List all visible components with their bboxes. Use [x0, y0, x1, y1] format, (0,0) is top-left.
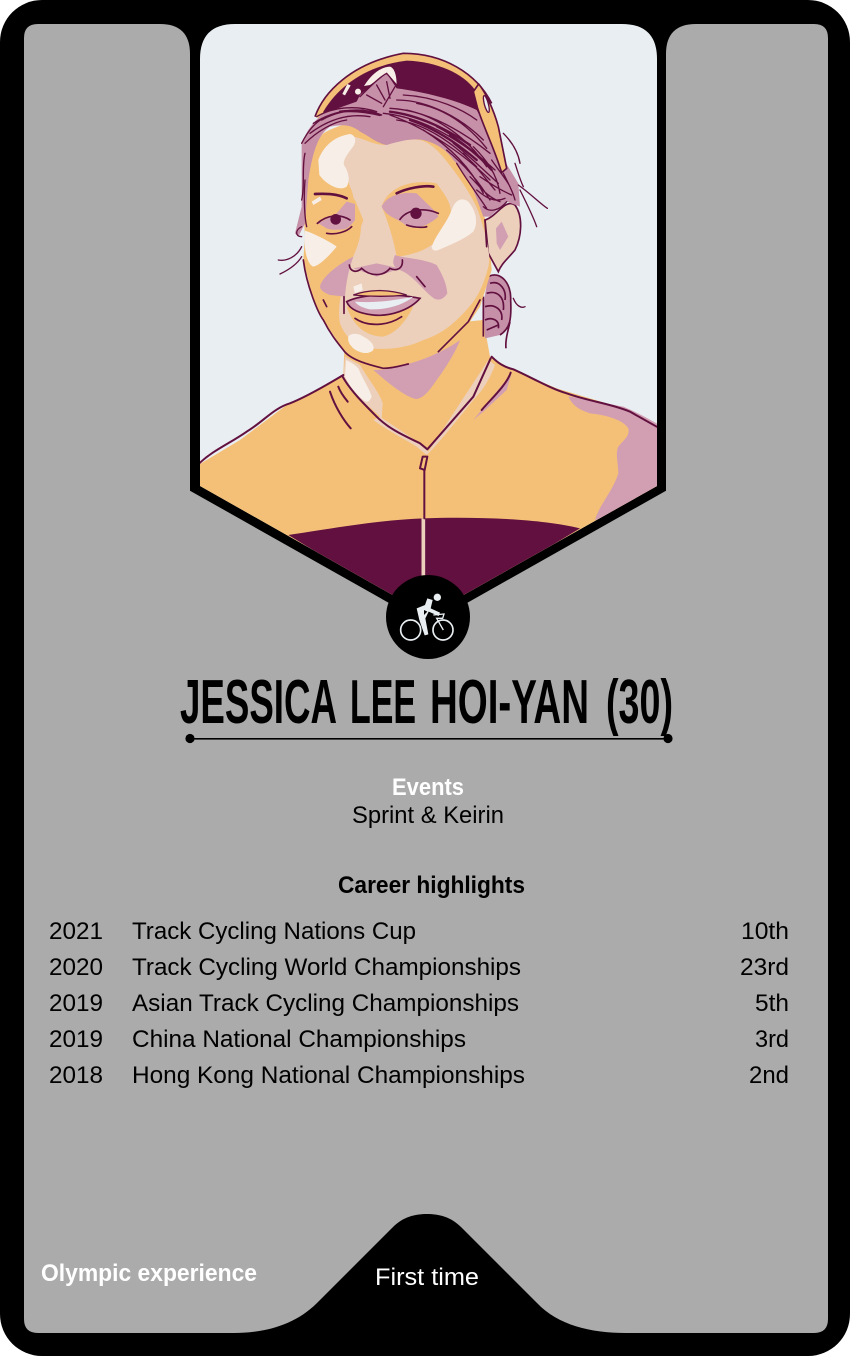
career highlights table: 2020: [49, 954, 103, 981]
hair: [295, 73, 520, 237]
career highlights table: 2nd: [749, 1062, 789, 1089]
career highlights table: 5th: [755, 990, 789, 1017]
facial features: [303, 186, 487, 368]
highlights: [318, 134, 355, 188]
hair strands and flyaways: [278, 73, 547, 307]
athlete name: (30): [606, 668, 673, 737]
icon badge: cyclist: [386, 575, 470, 659]
skin tones: [339, 137, 489, 349]
career highlights table: 3rd: [755, 1026, 789, 1053]
career highlights table: China National Championships: [132, 1026, 466, 1053]
cheek shadows: [393, 255, 447, 300]
career highlights table: [49, 918, 789, 1089]
bun: [483, 275, 511, 348]
athlete name: JESSICA: [180, 668, 337, 737]
athlete name: HOI-YAN: [430, 668, 589, 737]
career highlights table: 2019: [49, 990, 103, 1017]
ear: [485, 204, 521, 272]
jersey and neck: [200, 320, 657, 595]
career highlights table: Hong Kong National Championships: [132, 1062, 525, 1089]
portrait illustration: [200, 24, 657, 595]
career highlights heading: Career highlights: [338, 872, 525, 899]
olympic experience value: First time: [375, 1264, 479, 1291]
career highlights table: 10th: [741, 918, 789, 945]
career highlights table: Asian Track Cycling Championships: [132, 990, 519, 1017]
career highlights table: 23rd: [740, 954, 789, 981]
career highlights table: 2021: [49, 918, 103, 945]
face: [303, 120, 492, 368]
visor arm: [473, 84, 507, 173]
name underline: [185, 734, 673, 743]
career highlights table: Track Cycling Nations Cup: [132, 918, 416, 945]
events heading: Events: [392, 774, 464, 801]
sunglasses and visor: [315, 53, 492, 120]
athlete name: [180, 668, 673, 737]
events value: Sprint & Keirin: [352, 802, 504, 829]
career highlights table: Track Cycling World Championships: [132, 954, 521, 981]
olympic experience label: Olympic experience: [41, 1260, 257, 1287]
career highlights table: 2019: [49, 1026, 103, 1053]
career highlights table: 2018: [49, 1062, 103, 1089]
athlete name: LEE: [350, 668, 416, 737]
